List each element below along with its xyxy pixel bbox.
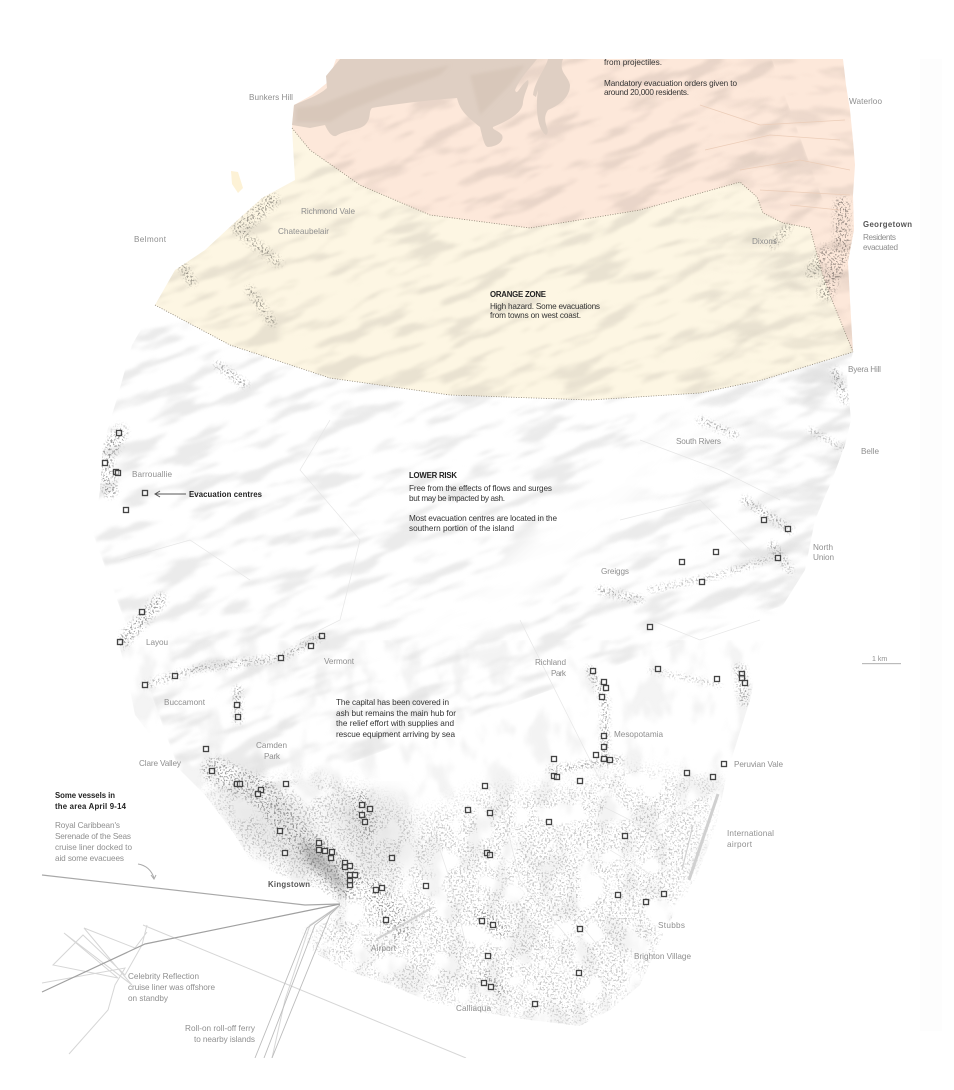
text block: red zone: around 20,000 residents. — [604, 88, 689, 97]
place labels: Mesopotamia — [614, 730, 663, 739]
text block: lower risk: Most evacuation centres are located in the — [409, 514, 557, 523]
place labels: Stubbs — [658, 921, 685, 930]
text block: vessels heading — [55, 791, 127, 811]
place labels: Barrouallie — [132, 470, 172, 479]
place labels: South Rivers — [676, 437, 721, 446]
airport runways — [377, 794, 718, 939]
text block: orange zone: High hazard. Some evacuations — [490, 302, 600, 311]
text block: Celebrity Reflection — [128, 972, 215, 1003]
text block: Royal Caribbean — [55, 821, 132, 863]
place labels: Chateaubelair — [278, 227, 329, 236]
place labels: Georgetown — [863, 220, 912, 229]
arrow: evacuation centres — [155, 491, 186, 497]
text block: Royal Caribbean: aid some evacuees — [55, 854, 124, 863]
place labels: airport — [727, 840, 753, 849]
map base: island terrain — [42, 59, 855, 1058]
place labels: Clare Valley — [139, 759, 182, 768]
place labels: Union — [813, 553, 834, 562]
place labels: Layou — [146, 638, 168, 647]
place labels: Kingstown — [268, 880, 310, 889]
panel: red zone — [292, 59, 855, 352]
text block: lower risk — [409, 471, 557, 533]
text block: capital: rescue equipment arriving by sea — [336, 730, 455, 739]
background strip at right — [920, 59, 942, 1031]
text block: red zone: from projectiles. — [604, 58, 662, 67]
text block: ferry: Roll-on roll-off ferry — [185, 1024, 256, 1033]
place labels: Camden — [256, 741, 287, 750]
evacuation centre markers — [102, 430, 790, 1006]
place labels: Belle — [861, 447, 879, 456]
text block: Royal Caribbean: cruise liner docked to — [55, 843, 132, 852]
place labels: Belmont — [134, 235, 167, 244]
text block: ferry — [185, 1024, 256, 1044]
vessel track: Serenade of the Seas — [42, 875, 340, 905]
panel: orange zone — [155, 128, 853, 400]
place labels: evacuated — [863, 243, 898, 252]
place labels: Greiggs — [601, 567, 629, 576]
text block: red zone — [604, 58, 737, 97]
text block: capital: the relief effort with supplies and — [336, 719, 454, 728]
text block: red zone: Mandatory evacuation orders given to — [604, 79, 737, 88]
place labels: Waterloo — [849, 97, 882, 106]
vessel tracks: light lines — [42, 905, 466, 1058]
place labels: Park — [551, 669, 567, 678]
scale bar — [862, 656, 901, 664]
place labels: Calliaqua — [456, 1004, 491, 1013]
place labels: Buccamont — [164, 698, 206, 707]
text block: vessels heading: the area April 9-14 — [55, 802, 127, 811]
place labels: Brighton Village — [634, 952, 691, 961]
text block: ferry: to nearby islands — [194, 1035, 255, 1044]
zone boundary: orange inner edge — [292, 128, 853, 352]
text block: lower risk: Free from the effects of flows and surges — [409, 484, 552, 493]
curved annotation arrow — [138, 864, 156, 879]
place labels: Richland — [535, 658, 566, 667]
place labels: Byera Hill — [848, 365, 881, 374]
place labels — [132, 93, 912, 1013]
text block: lower risk: LOWER RISK — [409, 471, 457, 480]
vessel tracks: ferry routes — [255, 905, 340, 1058]
place labels: Bunkers Hill — [249, 93, 293, 102]
text block: capital: ash but remains the main hub for — [336, 709, 456, 718]
text block: orange zone: ORANGE ZONE — [490, 290, 546, 299]
text block: vessels heading: Some vessels in — [55, 791, 115, 800]
place labels: North — [813, 543, 833, 552]
zone boundary: lower edge — [155, 305, 853, 400]
place labels: International — [727, 829, 774, 838]
text block: orange zone — [490, 290, 600, 320]
vessel track: Celebrity Reflection — [42, 904, 340, 992]
scale bar: 1 km — [872, 656, 887, 663]
rivers and roads in red zone — [700, 105, 850, 210]
text block: lower risk: but may be impacted by ash. — [409, 494, 505, 503]
text block: lower risk: southern portion of the island — [409, 524, 514, 533]
place labels: Peruvian Vale — [734, 760, 783, 769]
text block: Celebrity Reflection: cruise liner was offshore — [128, 983, 215, 992]
place labels: Park — [264, 752, 281, 761]
place labels: Richmond Vale — [301, 207, 355, 216]
text block: Celebrity Reflection: on standby — [128, 994, 169, 1003]
place labels: Residents — [863, 233, 896, 242]
text block: Royal Caribbean: Royal Caribbean's — [55, 821, 120, 830]
label: evacuation centres: Evacuation centres — [189, 490, 263, 499]
place labels: Airport — [371, 944, 397, 953]
text block: Celebrity Reflection: Celebrity Reflection — [128, 972, 199, 981]
lava darker streaks — [298, 68, 520, 120]
text block: orange zone: from towns on west coast. — [490, 311, 581, 320]
small islets — [231, 171, 243, 193]
place labels: Vermont — [324, 657, 355, 666]
text block: capital — [336, 698, 456, 739]
lava flows — [292, 59, 570, 147]
text block: capital: The capital has been covered in — [336, 698, 449, 707]
text block: Royal Caribbean: Serenade of the Seas — [55, 832, 131, 841]
place labels: Dixons — [752, 237, 777, 246]
